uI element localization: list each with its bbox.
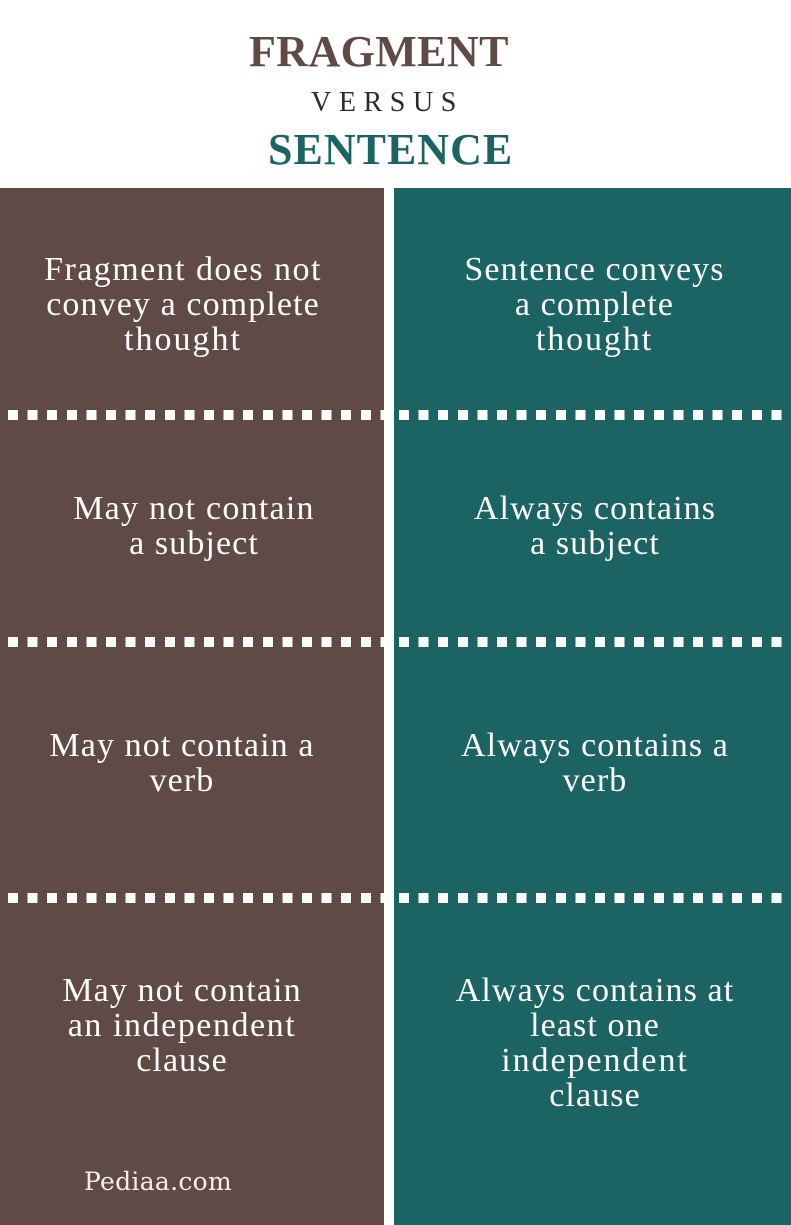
text: sentence clause: least one bbox=[530, 1006, 660, 1044]
text: fragment thought bbox=[44, 250, 322, 358]
text: fragment verb: verb bbox=[150, 762, 214, 798]
text: sentence clause: independent bbox=[501, 1042, 689, 1078]
title: Fragment: FRAGMENT bbox=[249, 26, 509, 76]
text: sentence clause bbox=[456, 972, 734, 1114]
text: fragment thought: convey a complete bbox=[46, 286, 320, 322]
text: fragment clause bbox=[62, 972, 302, 1078]
text: fragment clause: May not contain bbox=[62, 972, 302, 1008]
text: fragment subject bbox=[73, 490, 315, 562]
text: sentence thought: Sentence conveys bbox=[464, 250, 725, 288]
text: sentence clause: clause bbox=[549, 1076, 641, 1114]
panel: fragment column bbox=[0, 188, 384, 1225]
title: Sentence: SENTENCE bbox=[268, 125, 513, 174]
dotted divider 3 bbox=[8, 893, 782, 903]
text: sentence subject: Always contains bbox=[474, 490, 716, 526]
text: fragment thought: Fragment does not bbox=[44, 250, 322, 288]
text: sentence subject bbox=[474, 490, 716, 562]
text: sentence thought: a complete bbox=[515, 286, 674, 322]
text: sentence verb bbox=[461, 726, 729, 798]
text: sentence verb: verb bbox=[563, 762, 627, 798]
text: fragment thought: thought bbox=[124, 320, 242, 358]
text: sentence clause: Always contains at bbox=[456, 972, 734, 1008]
text: fragment clause: an independent bbox=[68, 1006, 296, 1044]
dotted divider 2 bbox=[8, 637, 782, 647]
text: fragment verb bbox=[49, 726, 315, 798]
logo: Pediaa.com: Pediaa.com bbox=[84, 1167, 232, 1196]
text: fragment clause: clause bbox=[136, 1042, 228, 1078]
text: sentence thought: thought bbox=[536, 320, 653, 358]
title: versus: VERSUS bbox=[311, 87, 464, 118]
text: sentence subject: a subject bbox=[530, 524, 660, 562]
text: fragment subject: May not contain bbox=[73, 490, 315, 526]
text: sentence verb: Always contains a bbox=[461, 726, 729, 764]
text: fragment verb: May not contain a bbox=[49, 726, 315, 764]
text: fragment subject: a subject bbox=[129, 524, 259, 562]
panel: sentence column bbox=[394, 188, 791, 1225]
text: sentence thought bbox=[464, 250, 725, 358]
dotted divider 1 bbox=[8, 410, 782, 420]
